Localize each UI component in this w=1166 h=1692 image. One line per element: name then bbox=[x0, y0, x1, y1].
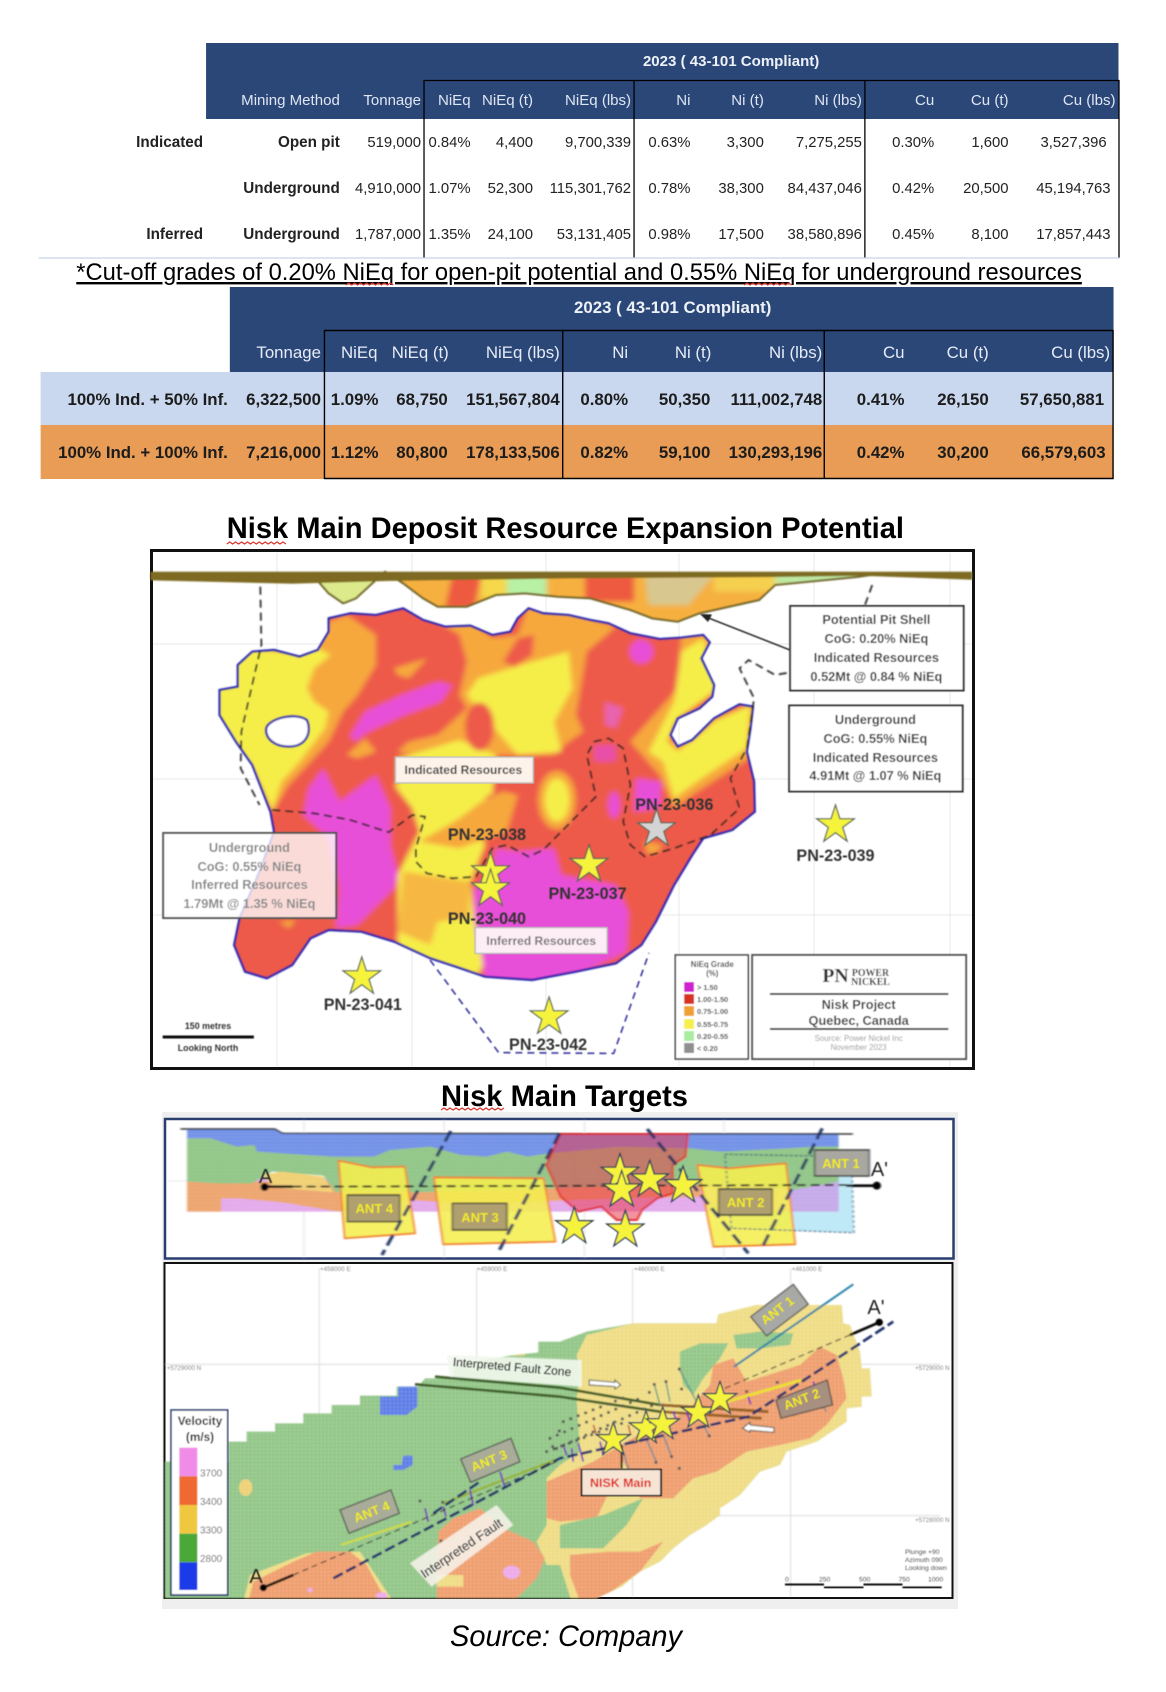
row: Inferred underground: 24,100 bbox=[488, 226, 533, 243]
column headers: Cu (t) bbox=[971, 92, 1009, 109]
row: Indicated underground: 52,300 bbox=[488, 180, 533, 197]
table header band bbox=[206, 43, 1119, 119]
table title: 2023 ( 43-101 Compliant) bbox=[643, 53, 819, 70]
panel: long section resource map bbox=[150, 550, 974, 1068]
surface line bbox=[180, 1129, 853, 1134]
NISK Main zone bbox=[546, 1134, 688, 1220]
column headers: Ni (t) bbox=[731, 92, 764, 109]
legend: velocity: Velocity bbox=[178, 1414, 223, 1428]
drill hole labels: PN-23-039 bbox=[796, 847, 875, 865]
callout: underground inferred: Inferred Resources bbox=[191, 877, 308, 892]
target zones bbox=[339, 1161, 795, 1247]
row: Inferred underground: 8,100 bbox=[971, 226, 1009, 243]
arrows pointing at fault zone bbox=[589, 1380, 774, 1432]
callout: potential pit shell: 0.52Mt @ 0.84 % NiEq bbox=[810, 669, 943, 684]
callout: underground inferred bbox=[163, 833, 336, 918]
section labels: ANT 4 bbox=[356, 1201, 394, 1216]
row: 100% indicated + 50% inferred: 57,650,881 bbox=[1020, 390, 1104, 409]
section labels: ANT 2 bbox=[727, 1195, 764, 1210]
arrow to pit shell bbox=[700, 614, 790, 650]
row: Inferred underground: Inferred bbox=[146, 226, 203, 243]
grid coordinate labels: +5729000 N bbox=[915, 1365, 950, 1372]
project title box with Power Nickel logo: Quebec, Canada bbox=[809, 1013, 910, 1028]
drill hole labels: PN-23-037 bbox=[548, 885, 627, 903]
target stars bbox=[597, 1382, 737, 1454]
drill hole labels: PN-23-042 bbox=[509, 1036, 587, 1054]
section labels: A' bbox=[871, 1159, 888, 1181]
row: 100% indicated + 50% inferred: 0.41% bbox=[857, 390, 905, 409]
column headers: Mining Method bbox=[241, 92, 340, 109]
column headers: Ni (lbs) bbox=[769, 343, 822, 362]
NISK Main leader line bbox=[619, 1445, 625, 1469]
callout: potential pit shell: Potential Pit Shell bbox=[822, 612, 930, 627]
grid coordinate labels bbox=[167, 1266, 950, 1524]
scale bar and view notes: Plunge +90 bbox=[905, 1549, 940, 1556]
column headers: NiEq (t) bbox=[392, 343, 449, 362]
row: 100% indicated + 100% inferred: 0.82% bbox=[580, 443, 628, 462]
heading: resource expansion potential: Nisk Main Deposit Resource Expansion Potential bbox=[227, 512, 904, 545]
grid coordinate labels: +5729000 N bbox=[167, 1365, 202, 1372]
callout: underground inferred: Underground bbox=[209, 840, 290, 855]
column headers: Ni bbox=[676, 92, 691, 109]
column headers: Cu (lbs) bbox=[1063, 92, 1116, 109]
callout: underground inferred: 1.79Mt @ 1.35 % NiEq bbox=[183, 896, 316, 911]
row: Inferred underground: 1,787,000 bbox=[355, 226, 421, 243]
row: 100% indicated + 50% inferred: 6,322,500 bbox=[246, 390, 321, 409]
label: inferred resources bbox=[475, 928, 607, 954]
column headers: NiEq bbox=[341, 343, 377, 362]
panel: cross section A to A' bbox=[165, 1119, 954, 1258]
footnote: cut-off grades: *Cut-off grades of 0.20% NiEq for open-pit potential and 0.55% NiEq for underground resources bbox=[76, 259, 1082, 286]
dashed expansion outline bbox=[430, 953, 649, 1053]
column headers: Cu bbox=[915, 92, 934, 109]
row: Indicated underground: 115,301,762 bbox=[550, 180, 631, 197]
scale bar and view notes: 250 bbox=[819, 1576, 831, 1584]
row: 100% indicated + 100% inferred: 0.42% bbox=[857, 443, 905, 462]
column headers: Ni (t) bbox=[675, 343, 711, 362]
callout: underground indicated: 4.91Mt @ 1.07 % NiEq bbox=[809, 768, 942, 783]
row: Indicated open pit: 3,527,396 bbox=[1041, 134, 1107, 151]
column headers: NiEq (lbs) bbox=[565, 92, 631, 109]
row: 100% indicated + 100% inferred: 178,133,506 bbox=[466, 443, 560, 462]
surface band bbox=[150, 572, 972, 584]
row: Inferred underground: 0.45% bbox=[892, 226, 934, 243]
scale bar and view notes bbox=[785, 1549, 947, 1588]
scale bar: Looking North bbox=[178, 1043, 238, 1053]
callout: potential pit shell: CoG: 0.20% NiEq bbox=[824, 631, 928, 646]
legend: NiEq grade: 0.75-1.00 bbox=[697, 1007, 728, 1016]
row: Indicated open pit: 4,400 bbox=[496, 134, 533, 151]
project title box with Power Nickel logo: November 2023 bbox=[831, 1043, 887, 1052]
labels on map: A bbox=[249, 1566, 263, 1588]
legend: velocity: 2800 bbox=[200, 1554, 223, 1565]
drill hole labels: PN-23-041 bbox=[324, 996, 402, 1014]
row: Indicated underground: 45,194,763 bbox=[1036, 180, 1111, 197]
orange bands bbox=[272, 614, 380, 809]
legend: velocity: 3300 bbox=[200, 1526, 223, 1536]
row: Indicated underground: 0.78% bbox=[648, 180, 691, 197]
row: Indicated open pit bbox=[136, 134, 1107, 151]
labels on map: A' bbox=[867, 1297, 885, 1319]
column headers: NiEq (t) bbox=[482, 92, 533, 109]
column headers: Ni bbox=[612, 343, 628, 362]
drill targets: stars bbox=[343, 805, 854, 1033]
column headers: Cu (t) bbox=[947, 343, 989, 362]
row: 100% indicated + 100% inferred: 100% Ind. + 100% Inf. bbox=[58, 443, 228, 462]
legend: NiEq grade: (%) bbox=[706, 969, 719, 978]
scale bar and view notes: 500 bbox=[859, 1576, 871, 1584]
magenta zones bbox=[303, 768, 398, 928]
project title box with Power Nickel logo bbox=[752, 955, 966, 1059]
blue dashed faults bbox=[333, 1322, 893, 1578]
row: Indicated underground: 84,437,046 bbox=[788, 180, 862, 197]
icon: Power Nickel logo: PN bbox=[822, 965, 849, 987]
heading: Nisk Main Targets: Nisk Main Targets bbox=[441, 1080, 688, 1113]
row: 100% indicated + 50% inferred: 26,150 bbox=[937, 390, 989, 409]
row: 100% indicated + 50% inferred: 0.80% bbox=[580, 390, 628, 409]
grid coordinate labels: +5728000 N bbox=[915, 1517, 950, 1524]
grid coordinate labels: +460000 E bbox=[634, 1266, 665, 1273]
row: 100% indicated + 100% inferred: 30,200 bbox=[937, 443, 989, 462]
label: inferred resources: Inferred Resources bbox=[486, 934, 596, 948]
dashed resource boundaries bbox=[241, 585, 872, 878]
labels on map: Interpreted Fault Zone bbox=[452, 1355, 572, 1379]
column headers: Cu (lbs) bbox=[1051, 343, 1110, 362]
row: Inferred underground: 17,500 bbox=[718, 226, 764, 243]
column headers: Tonnage bbox=[363, 92, 421, 109]
target stars bbox=[556, 1154, 702, 1246]
row: Inferred underground: 0.98% bbox=[648, 226, 691, 243]
legend: NiEq grade: 0.55-0.75 bbox=[697, 1020, 728, 1029]
legend: NiEq grade: > 1.50 bbox=[697, 983, 718, 992]
project title box with Power Nickel logo: Nisk Project bbox=[822, 997, 896, 1012]
legend: NiEq grade: 0.20-0.55 bbox=[697, 1032, 728, 1041]
labels on map: Interpreted Fault bbox=[418, 1515, 506, 1581]
section labels: ANT 1 bbox=[822, 1156, 860, 1171]
drill holes bbox=[420, 1369, 827, 1541]
rotated target boxes bbox=[340, 1284, 833, 1533]
row: Indicated underground: 20,500 bbox=[963, 180, 1009, 197]
row: 100% indicated + 50% inferred: 68,750 bbox=[396, 390, 448, 409]
row: Indicated underground: 1.07% bbox=[428, 180, 471, 197]
label: indicated resources bbox=[395, 757, 533, 783]
drill hole labels: PN-23-038 bbox=[448, 826, 526, 844]
labels on map: ANT 3 bbox=[469, 1447, 509, 1475]
row: 100% indicated + 100% inferred: 130,293,196 bbox=[729, 443, 822, 462]
column headers: Ni (lbs) bbox=[814, 92, 862, 109]
labels on map: ANT 1 bbox=[758, 1293, 797, 1328]
legend: NiEq grade: < 0.20 bbox=[697, 1044, 718, 1053]
column headers: Cu bbox=[883, 343, 905, 362]
project title box with Power Nickel logo: Source: Power Nickel Inc bbox=[815, 1034, 903, 1043]
row: Indicated open pit: 519,000 bbox=[367, 134, 421, 151]
callout: underground indicated: Indicated Resources bbox=[813, 750, 938, 765]
row: 100% indicated + 100% inferred: 1.12% bbox=[331, 443, 378, 462]
row: Indicated open pit: 1,600 bbox=[971, 134, 1009, 151]
row: 100% indicated + 100% inferred: 7,216,000 bbox=[246, 443, 321, 462]
grid coordinate labels: +458000 E bbox=[320, 1266, 351, 1273]
grid coordinate labels: +459000 E bbox=[477, 1266, 507, 1273]
table header band bbox=[230, 287, 1114, 372]
row: Indicated open pit: Indicated bbox=[136, 134, 203, 151]
legend: velocity: 3400 bbox=[200, 1497, 223, 1508]
planned extent fill bbox=[725, 1154, 854, 1233]
scale bar bbox=[163, 1021, 254, 1053]
section labels bbox=[259, 1156, 888, 1225]
legend: NiEq grade: 1.00-1.50 bbox=[697, 995, 728, 1004]
labels on map: ANT 4 bbox=[351, 1498, 393, 1526]
row: Inferred underground: 17,857,443 bbox=[1036, 226, 1111, 243]
row: 100% indicated + 50% inferred bbox=[41, 372, 1114, 425]
row: Indicated open pit: 7,275,255 bbox=[796, 134, 862, 151]
interpreted faults bbox=[382, 1128, 822, 1255]
label: indicated resources: Indicated Resources bbox=[405, 763, 522, 777]
drill hole labels: PN-23-036 bbox=[635, 796, 713, 814]
velocity layers bbox=[187, 1129, 839, 1212]
scale bar and view notes: 0 bbox=[785, 1576, 789, 1584]
callout: potential pit shell bbox=[790, 606, 964, 690]
icon: Power Nickel logo: POWER bbox=[852, 968, 890, 979]
section labels: A bbox=[259, 1166, 273, 1188]
row: Indicated open pit: 0.84% bbox=[428, 134, 471, 151]
row: 100% indicated + 50% inferred: 50,350 bbox=[659, 390, 710, 409]
labels on map: ANT 2 bbox=[781, 1386, 822, 1413]
row: Indicated underground: 4,910,000 bbox=[355, 180, 421, 197]
drill hole labels: PN-23-040 bbox=[448, 910, 526, 928]
callout: underground indicated bbox=[789, 706, 963, 792]
row: 100% indicated + 100% inferred: 80,800 bbox=[396, 443, 448, 462]
target traces bbox=[341, 1284, 853, 1545]
column headers: NiEq bbox=[438, 92, 471, 109]
row: Inferred underground bbox=[146, 226, 1111, 243]
row: Inferred underground: 53,131,405 bbox=[557, 226, 631, 243]
row: Indicated open pit: 0.63% bbox=[648, 134, 691, 151]
icon: Power Nickel logo: NICKEL bbox=[851, 977, 890, 988]
section line A to A' bbox=[260, 1319, 883, 1591]
row: 100% indicated + 100% inferred bbox=[41, 425, 1114, 479]
legend: NiEq grade: NiEq Grade bbox=[691, 960, 734, 969]
drill hole labels bbox=[324, 796, 875, 1054]
row: 100% indicated + 100% inferred: 59,100 bbox=[659, 443, 710, 462]
column headers bbox=[256, 343, 1110, 362]
target boxes bbox=[347, 1150, 869, 1230]
row: Indicated open pit: 3,300 bbox=[727, 134, 764, 151]
row: Indicated underground bbox=[243, 180, 1111, 197]
callout: underground inferred: CoG: 0.55% NiEq bbox=[198, 859, 301, 874]
row: Indicated underground: 38,300 bbox=[718, 180, 764, 197]
row: 100% indicated + 100% inferred: 66,579,603 bbox=[1021, 443, 1106, 462]
scale bar: 150 metres bbox=[185, 1021, 231, 1031]
column headers: Tonnage bbox=[256, 343, 321, 362]
row: 100% indicated + 50% inferred: 1.09% bbox=[331, 390, 378, 409]
block model and shapes bbox=[150, 568, 972, 985]
row: Inferred underground: 1.35% bbox=[428, 226, 471, 243]
scale bar and view notes: 750 bbox=[898, 1576, 910, 1584]
row: 100% indicated + 50% inferred: 151,567,804 bbox=[466, 390, 560, 409]
icon: Power Nickel logo bbox=[822, 965, 890, 988]
label: NISK Main: NISK Main bbox=[590, 1476, 651, 1490]
column headers: NiEq (lbs) bbox=[486, 343, 560, 362]
row: Indicated open pit: 0.30% bbox=[892, 134, 934, 151]
row: Indicated open pit: 9,700,339 bbox=[565, 134, 631, 151]
column headers bbox=[241, 92, 1116, 109]
labels on map bbox=[249, 1293, 885, 1588]
table: combined indicated and inferred totals bbox=[41, 287, 1114, 479]
scale bar and view notes: Azimuth 090 bbox=[905, 1557, 943, 1564]
grid coordinate labels: +461000 E bbox=[792, 1266, 822, 1273]
legend: velocity bbox=[171, 1410, 228, 1595]
lower yellow column bbox=[394, 785, 492, 975]
callout: potential pit shell: Indicated Resources bbox=[814, 650, 939, 665]
row: Indicated underground: 0.42% bbox=[892, 180, 934, 197]
velocity model bbox=[160, 1298, 893, 1602]
panel: targets figure frame bbox=[162, 1112, 958, 1609]
row: Indicated underground: Underground bbox=[243, 180, 340, 197]
legend: velocity: 3700 bbox=[200, 1468, 223, 1480]
section line A to A' bbox=[261, 1182, 881, 1191]
map annotations bbox=[163, 606, 966, 1059]
label backgrounds bbox=[410, 1355, 582, 1587]
callout: underground indicated: Underground bbox=[835, 712, 916, 727]
row: 100% indicated + 50% inferred: 111,002,748 bbox=[731, 390, 822, 409]
section labels: ANT 3 bbox=[461, 1210, 499, 1225]
scale bar and view notes: 1000 bbox=[928, 1576, 943, 1584]
row: 100% indicated + 50% inferred: 100% Ind. + 50% Inf. bbox=[67, 390, 228, 409]
panel: plan view velocity map bbox=[160, 1263, 952, 1602]
scale bar and view notes: Looking down bbox=[905, 1565, 947, 1572]
row: Inferred underground: Underground bbox=[243, 226, 340, 243]
right side yellow bbox=[630, 635, 758, 808]
legend: NiEq grade bbox=[675, 955, 748, 1059]
label: NISK Main bbox=[582, 1469, 661, 1496]
resource body bbox=[216, 605, 761, 985]
pit shell bbox=[310, 568, 878, 625]
interpreted fault zone lines bbox=[415, 1377, 768, 1418]
callout: underground indicated: CoG: 0.55% NiEq bbox=[823, 731, 927, 746]
table: 2023 resource estimate by mining method bbox=[39, 43, 1119, 258]
legend: velocity: (m/s) bbox=[186, 1430, 214, 1444]
source note: Source: Company bbox=[450, 1620, 684, 1653]
row: Indicated open pit: Open pit bbox=[278, 134, 340, 151]
table title: 2023 ( 43-101 Compliant) bbox=[574, 298, 771, 317]
row: Inferred underground: 38,580,896 bbox=[788, 226, 862, 243]
